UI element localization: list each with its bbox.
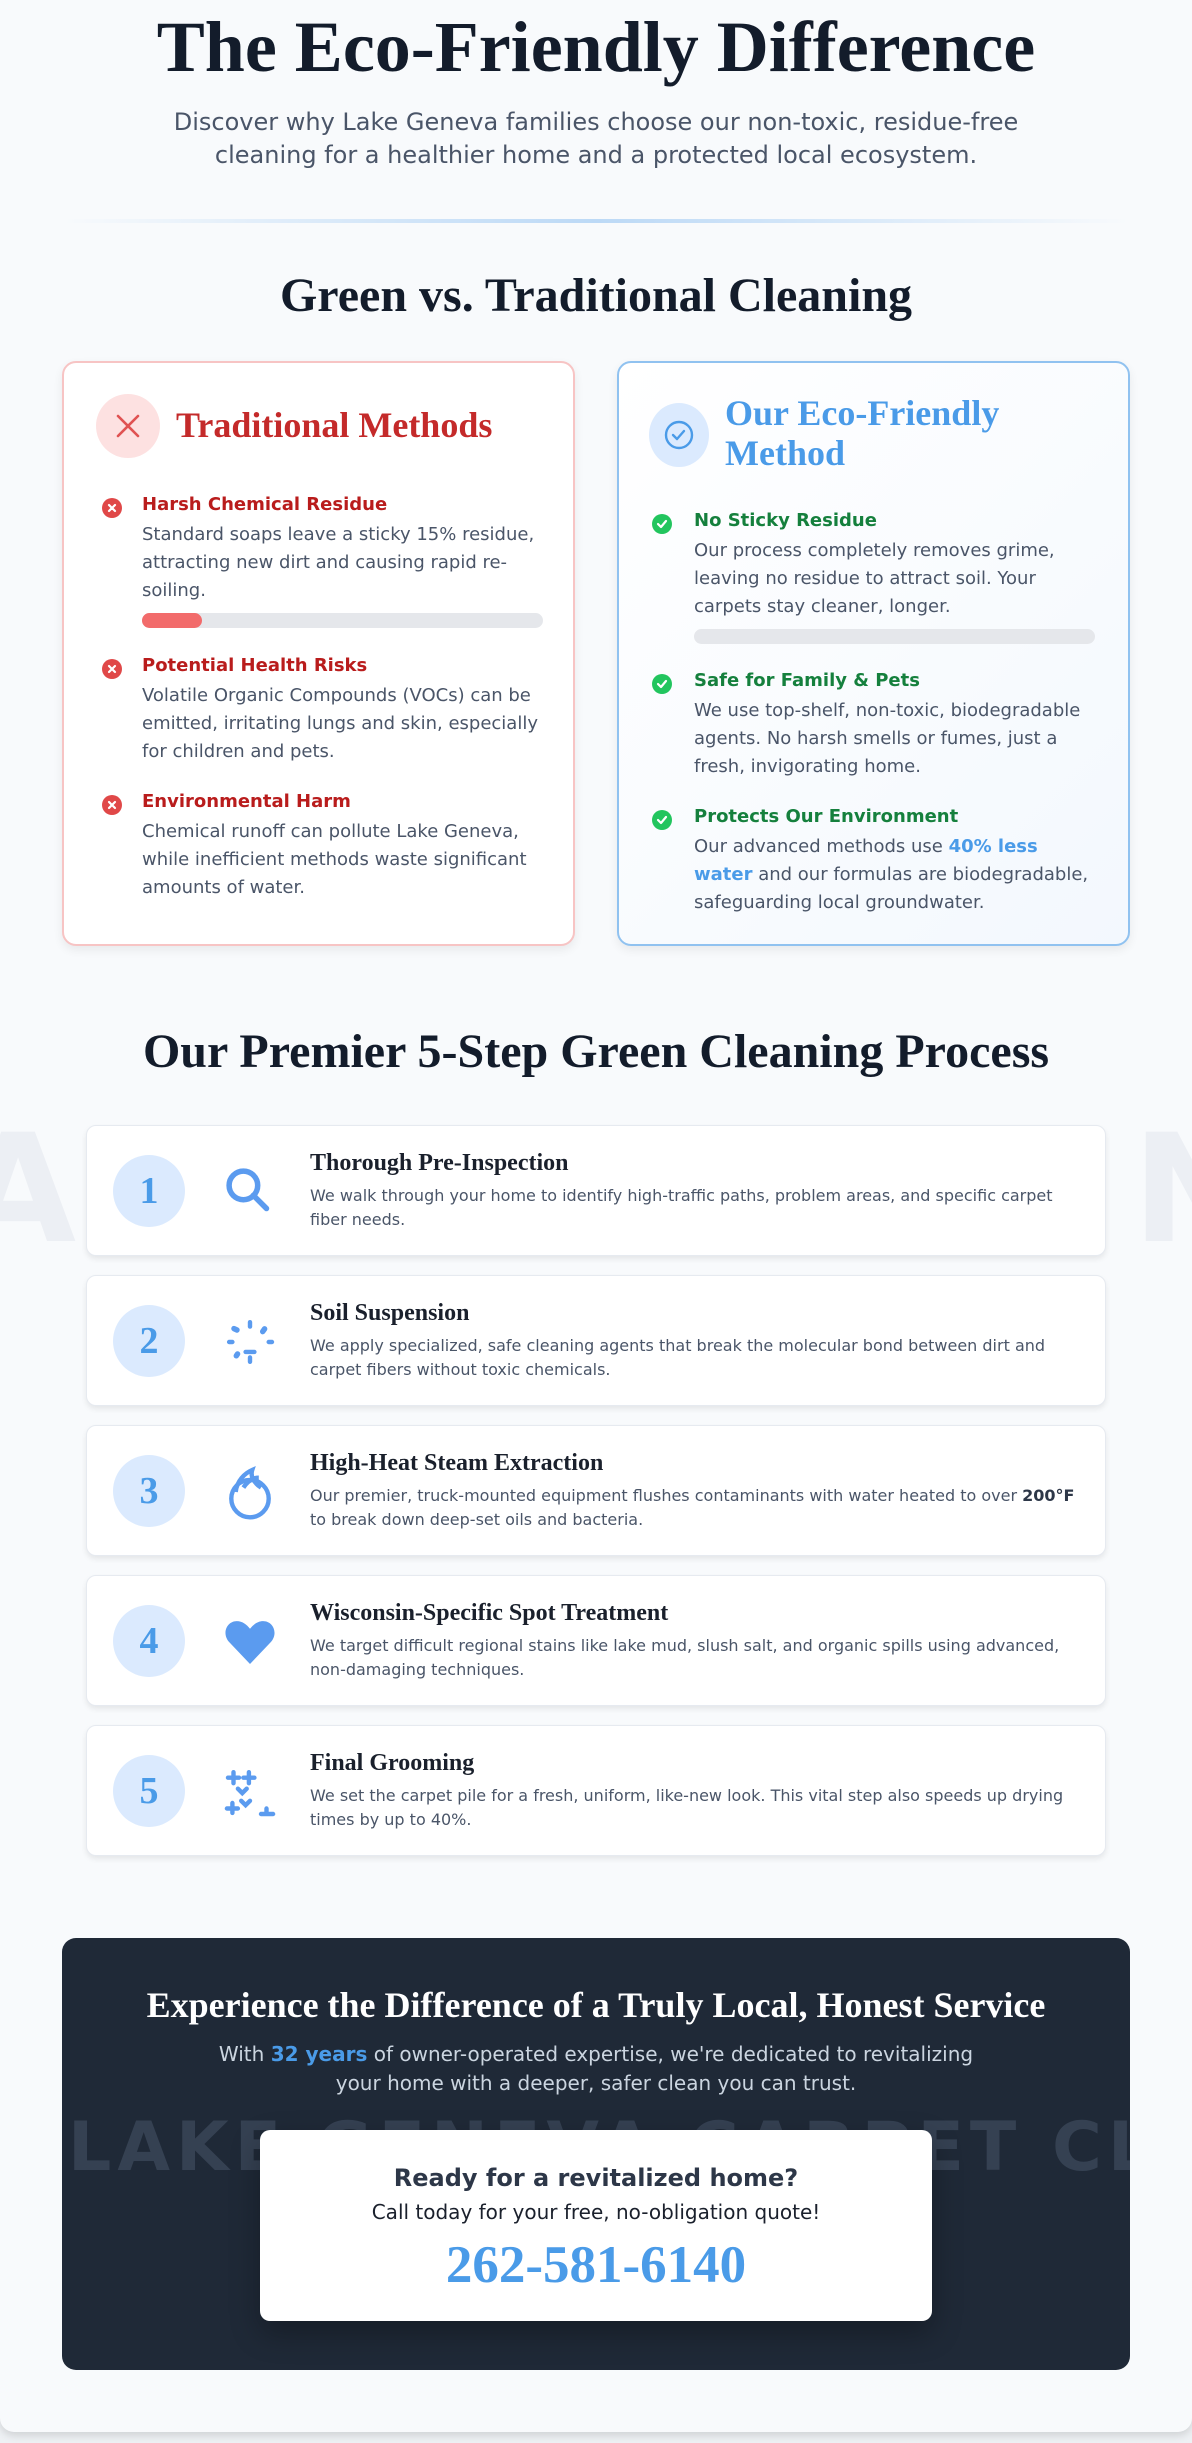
step 5: 5 [140, 1770, 158, 1812]
item: safe for family [652, 670, 1080, 777]
callout: phone card: Call today for your free, no-obligation quote! [372, 2200, 820, 2224]
heading: 5-step process: Our Premier 5-Step Green Cleaning Process [143, 1025, 1049, 1078]
panel: traditional methods: Volatile Organic Compounds (VOCs) can be emitted, irritating lungs and skin, especially for children and pets. [142, 685, 538, 762]
step 1 [86, 1125, 1106, 1256]
cta text: With 32 years of owner-operated expertise, we're dedicated to revitalizing your home with a deeper, safer clean you can trust. [219, 2042, 973, 2095]
panel: eco-friendly method: Our advanced methods use 40% less [694, 836, 1038, 857]
panel: eco-friendly method [617, 361, 1130, 946]
panel heading: Method [725, 433, 845, 473]
panel: traditional methods: Chemical runoff can pollute Lake Geneva, while inefficient methods waste significant amounts of water. [142, 821, 527, 898]
panel: eco-friendly method: We use top-shelf, non-toxic, biodegradable agents. No harsh smells or fumes, just a fresh, invigorating home. [694, 700, 1080, 777]
step 4: We target difficult regional stains like lake mud, slush salt, and organic spills using advanced, non-damaging techniques. [310, 1636, 1059, 1679]
step 3: Our premier, truck-mounted equipment flushes contaminants with water heated to over 200°F to break down deep-set oils and bacteria. [310, 1486, 1074, 1529]
panel: eco-friendly method: Our process completely removes grime, leaving no residue to attract soil. Your carpets stay cleaner, longer. [694, 540, 1055, 617]
item: protects environment [652, 806, 1088, 913]
cta heading: Experience the Difference of a Truly Local, Honest Service [147, 1985, 1045, 2025]
step 2: 2 [140, 1320, 158, 1362]
icon: sparkles [224, 1770, 276, 1816]
panel: traditional methods: Potential Health Risks [142, 655, 367, 676]
step 5: Final Grooming [310, 1750, 474, 1776]
step 1: We walk through your home to identify high-traffic paths, problem areas, and specific carpet fiber needs. [310, 1186, 1053, 1229]
panel: traditional methods [62, 361, 575, 946]
subtitle: Discover why Lake Geneva families choose our non-toxic, residue-free cleaning for a healthier home and a protected local ecosystem. [174, 108, 1018, 169]
callout: phone card: 262-581-6140 [446, 2236, 746, 2294]
icon: x circle [96, 394, 160, 458]
item: environmental harm [102, 791, 527, 898]
title: The Eco-Friendly Difference [157, 7, 1035, 87]
step 5 [86, 1725, 1106, 1856]
panel heading: Traditional Methods [176, 405, 492, 445]
step 5: We set the carpet pile for a fresh, uniform, like-new look. This vital step also speeds up drying times by up to 40%. [310, 1786, 1063, 1829]
step 3: 3 [140, 1470, 158, 1512]
cta panel [62, 1938, 1130, 2370]
icon: steam swirl [229, 1466, 271, 1520]
step 2: We apply specialized, safe cleaning agents that break the molecular bond between dirt and carpet fibers without toxic chemicals. [310, 1336, 1045, 1379]
panel: eco-friendly method: Safe for Family & Pets [694, 670, 920, 691]
panel: eco-friendly method: Protects Our Environment [694, 806, 958, 827]
icon: dispersing dots [226, 1320, 274, 1364]
step 3: High-Heat Steam Extraction [310, 1450, 603, 1476]
panel heading [725, 393, 1000, 473]
panel: traditional methods: Standard soaps leave a sticky 15% residue, attracting new dirt and causing rapid re-soiling. [142, 524, 534, 601]
item: harsh chemical residue [102, 494, 543, 628]
step 2: Soil Suspension [310, 1300, 469, 1326]
step 3 [86, 1425, 1106, 1556]
step 1: 1 [140, 1170, 158, 1212]
step 4: Wisconsin-Specific Spot Treatment [310, 1600, 668, 1626]
item: no sticky residue [652, 510, 1095, 644]
panel: traditional methods: Harsh Chemical Residue [142, 494, 387, 515]
step 2 [86, 1275, 1106, 1406]
heading: green vs traditional: Green vs. Traditional Cleaning [280, 269, 912, 322]
icon: magnifier [226, 1168, 270, 1212]
panel: traditional methods: Environmental Harm [142, 791, 351, 812]
panel heading: Our Eco-Friendly [725, 393, 999, 433]
callout: phone card [260, 2130, 932, 2321]
panel: eco-friendly method: water and our formulas are biodegradable, safeguarding local groundwater. [694, 864, 1088, 913]
icon: check circle [649, 403, 709, 467]
callout: phone card: Ready for a revitalized home? [394, 2164, 798, 2192]
step 4 [86, 1575, 1106, 1706]
icon: heart [225, 1621, 274, 1664]
step 4: 4 [140, 1620, 158, 1662]
panel: eco-friendly method: No Sticky Residue [694, 510, 877, 531]
item: potential health risks [102, 655, 538, 762]
step 1: Thorough Pre-Inspection [310, 1150, 568, 1176]
